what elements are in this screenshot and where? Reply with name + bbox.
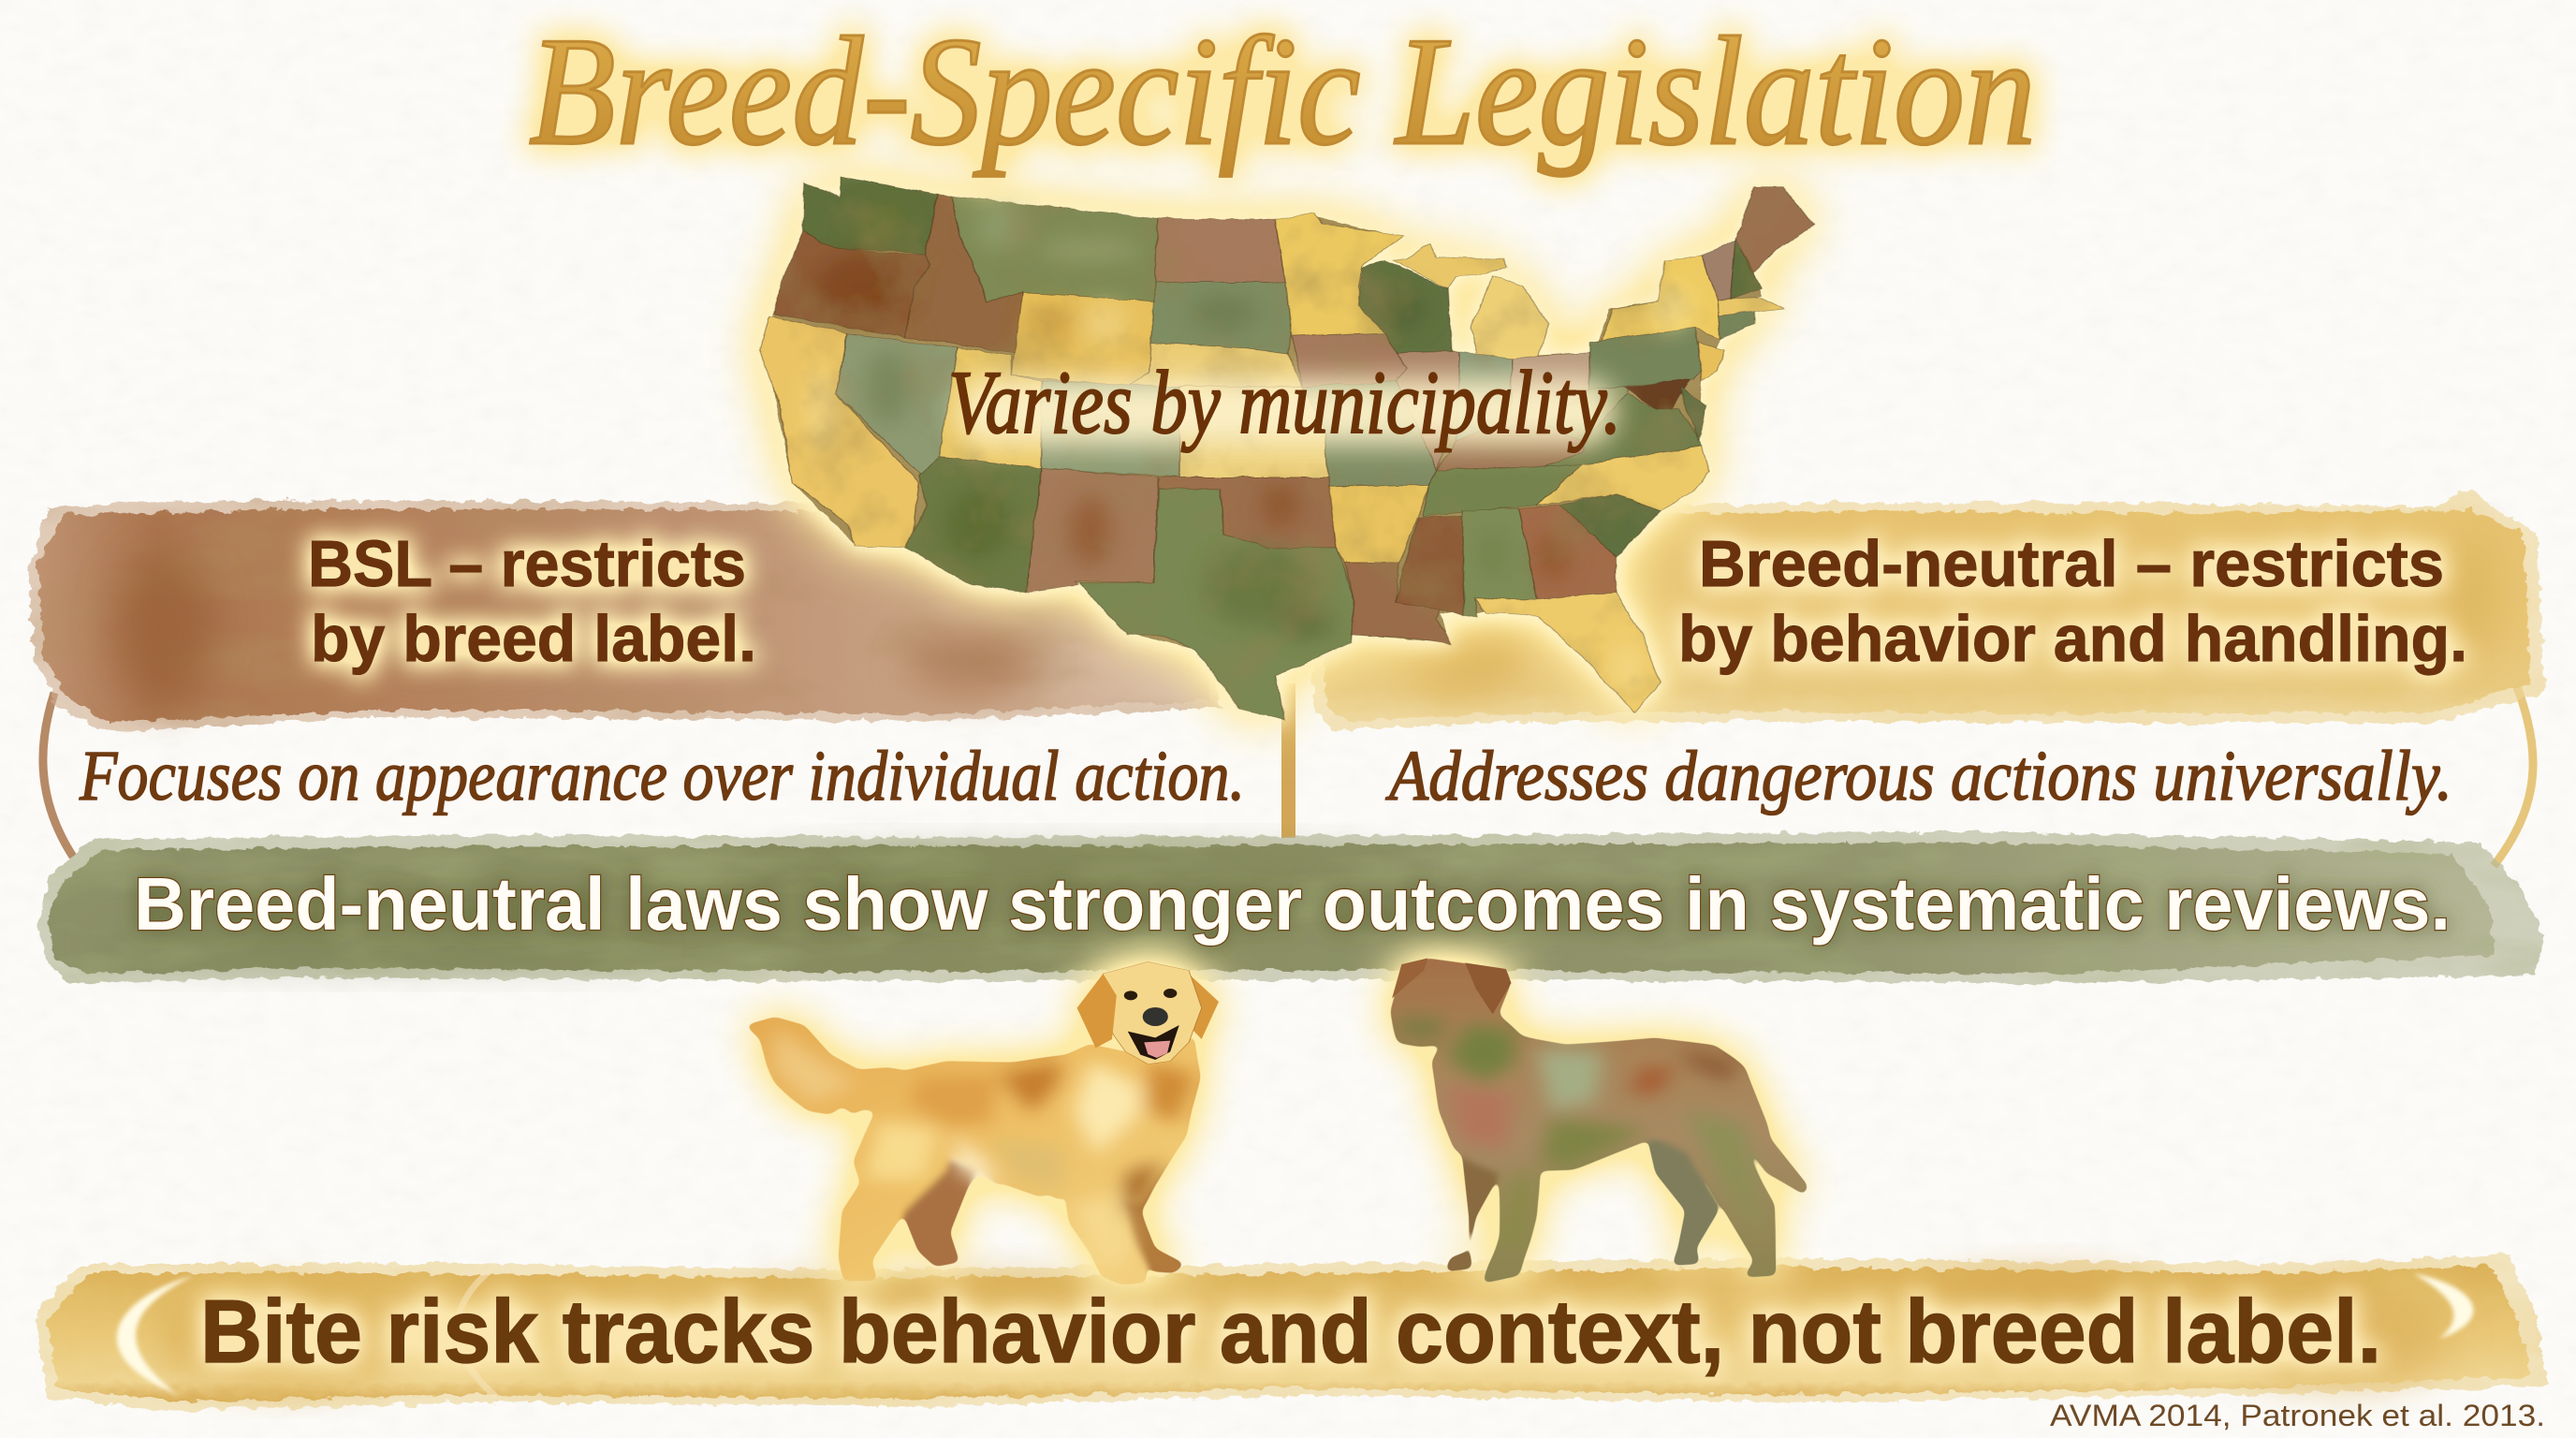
wash: gold edges [159, 1276, 2452, 1386]
state: PA [1590, 328, 1702, 390]
state: SD [1151, 283, 1292, 353]
washes: state pigment pooling [812, 203, 1690, 694]
state: NH [1731, 239, 1762, 300]
state: NJ [1698, 343, 1724, 381]
state: CA [760, 316, 918, 548]
wash: dark streak [112, 548, 1039, 707]
state: GA [1519, 505, 1617, 599]
text: breed-neutral detail: Addresses dangerous actions universally. [1384, 737, 2452, 815]
far front leg [1121, 1159, 1185, 1273]
highlight: left crescent [117, 1275, 195, 1395]
state: VA [1545, 394, 1702, 466]
state: MI lower [1471, 275, 1549, 359]
panel: BSL brown band [28, 500, 1222, 732]
state: CO [1042, 381, 1179, 477]
body [1390, 958, 1808, 1284]
citation: AVMA 2014, Patronek et al. 2013. [2050, 1399, 2545, 1432]
map: United States watercolor [760, 176, 1814, 720]
right ear [1185, 971, 1219, 1039]
head [1099, 961, 1202, 1064]
connector: right gold stem [2494, 669, 2533, 866]
conclusion text: Breed-neutral laws show stronger outcomes in systematic reviews. [134, 862, 2451, 946]
state: OK [1159, 477, 1337, 548]
title: Breed-Specific Legislation [529, 5, 2036, 177]
scroll fold line [458, 1266, 496, 1397]
state: WA [803, 176, 937, 256]
heading: breed-neutral: Breed-neutral – restricts [1699, 527, 2444, 600]
heading: breed-neutral [1678, 527, 2467, 675]
takeaway text: Bite risk tracks behavior and context, not breed label. [200, 1282, 2381, 1382]
state: MD [1624, 378, 1690, 409]
wash: olive darker center [94, 855, 1413, 961]
ear near [1465, 962, 1512, 1014]
state: NE [1127, 343, 1303, 387]
coat blotches [1398, 1014, 1767, 1248]
mouth [1128, 1025, 1179, 1060]
state: KY [1437, 417, 1583, 470]
body and coat [745, 1017, 1200, 1285]
heading: BSL: BSL – restricts [308, 527, 746, 600]
heading: BSL [308, 527, 756, 675]
state: WV [1545, 387, 1628, 442]
state: TX [1079, 489, 1355, 720]
body group with rounded silhouette [745, 1017, 1200, 1285]
connector: center divider [1281, 683, 1295, 838]
state: ID [905, 195, 1023, 353]
state: ME [1735, 187, 1814, 271]
wash: gold pooling [1395, 534, 2499, 693]
state: AL [1463, 508, 1538, 616]
nose [1143, 1007, 1168, 1026]
far front leg [1445, 1149, 1500, 1272]
silhouette backing [766, 196, 1777, 716]
map callout: varies by municipality: Varies by municipality. [948, 352, 1621, 452]
tongue [1144, 1041, 1170, 1058]
eye right [1164, 989, 1177, 998]
state: MO [1303, 381, 1437, 487]
state: SC [1560, 494, 1661, 557]
panel: conclusion olive band [37, 831, 2544, 985]
connector: left brown stem [43, 693, 73, 857]
state: IA [1292, 333, 1407, 387]
state: AR [1329, 485, 1429, 563]
highlight: right crescent [2413, 1273, 2473, 1339]
coat shading [775, 1027, 1196, 1276]
far hind leg [1647, 1140, 1719, 1266]
state: OR [773, 229, 929, 337]
dog: mixed breed [1390, 958, 1808, 1284]
state: MT [950, 196, 1157, 301]
state: VT [1702, 241, 1735, 300]
state: NV [836, 333, 958, 476]
body group with rounded silhouette [1390, 958, 1808, 1284]
state: MA [1717, 298, 1784, 316]
heading: breed-neutral: by behavior and handling. [1678, 602, 2467, 675]
text: BSL detail: Focuses on appearance over individual action. [79, 737, 1245, 815]
state: WY [1012, 292, 1156, 387]
state: WI [1359, 261, 1452, 353]
state: LA [1344, 563, 1452, 644]
panel: breed-neutral gold band [1306, 487, 2544, 730]
ear far [1392, 958, 1427, 999]
state: IN [1456, 351, 1512, 442]
state: NC [1538, 446, 1709, 511]
heading: BSL: by breed label. [311, 602, 756, 675]
state: TN [1422, 464, 1583, 516]
panel: bottom takeaway band [36, 1255, 2548, 1411]
state: NY [1590, 256, 1720, 343]
left ear [1077, 974, 1117, 1048]
state: ND [1156, 218, 1285, 283]
state: UT [940, 348, 1042, 468]
state: CT [1719, 313, 1754, 339]
state: MS [1396, 516, 1463, 616]
state: NM [1027, 468, 1159, 593]
state: KS [1179, 387, 1329, 477]
state: DE [1679, 387, 1705, 442]
state: IL [1396, 351, 1459, 470]
state: MN [1275, 213, 1403, 337]
state: OH [1512, 351, 1590, 424]
state: MI upper [1392, 244, 1508, 288]
eye left [1124, 990, 1137, 1000]
dog: golden retriever [745, 961, 1219, 1285]
state: AZ [905, 457, 1042, 593]
far hind leg [903, 1161, 974, 1267]
state: FL [1474, 593, 1661, 712]
